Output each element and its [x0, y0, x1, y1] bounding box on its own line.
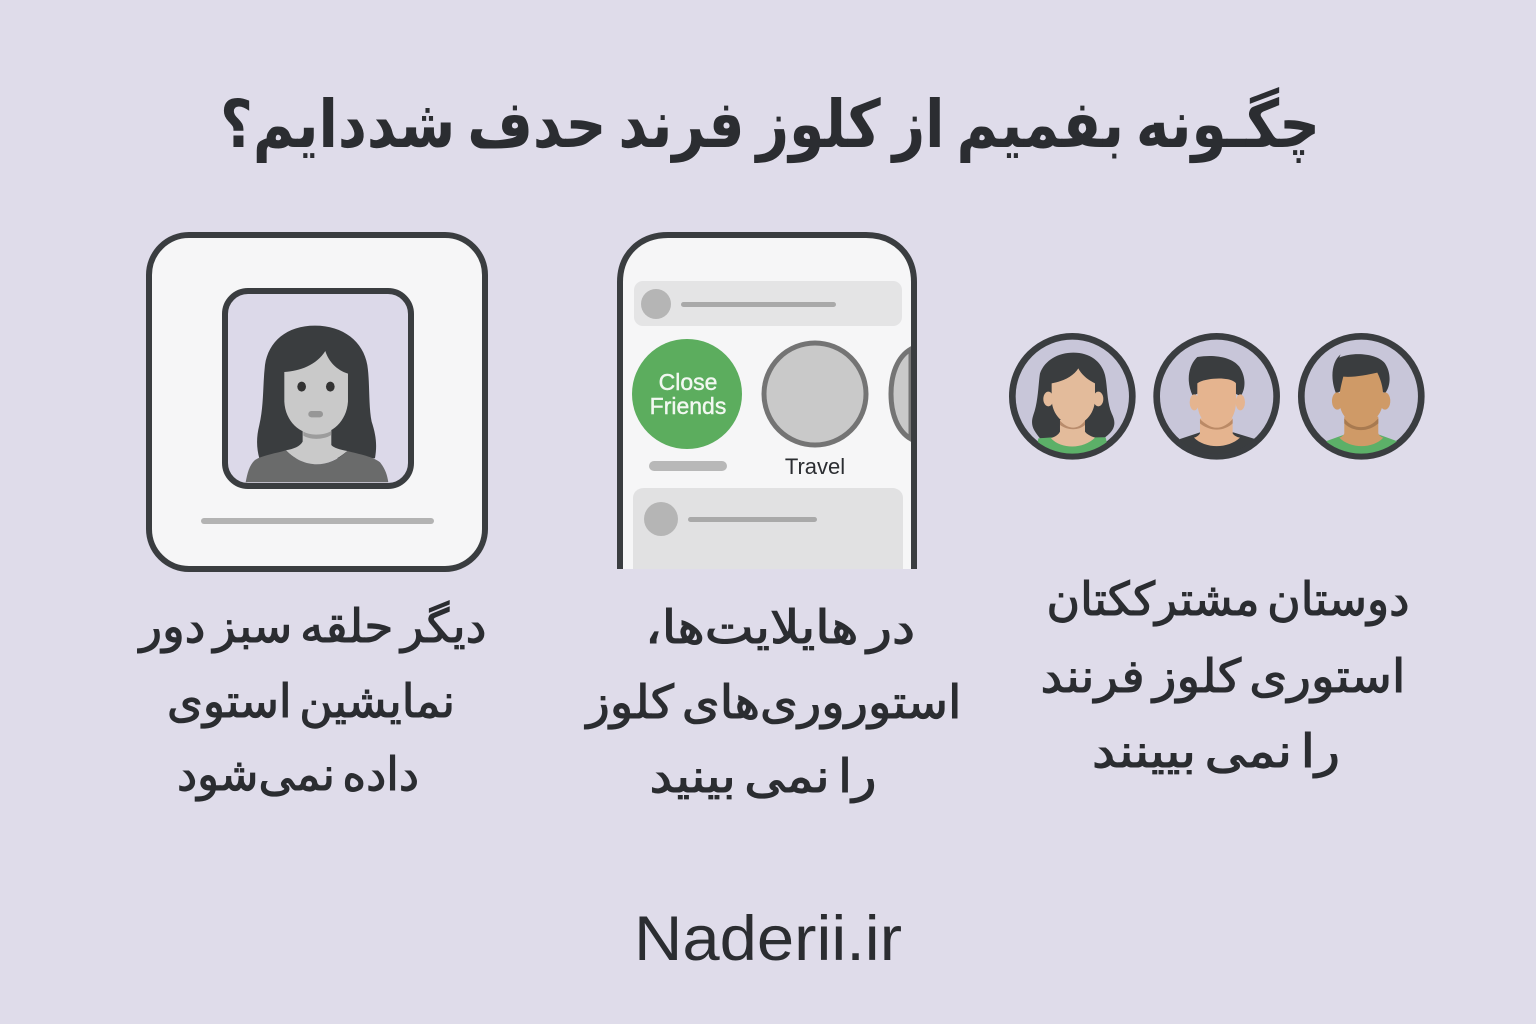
- panel: profile card icon: [149, 235, 485, 569]
- text block: right column: را نمی بیینند: [1092, 724, 1340, 778]
- text block: left column: دیگر حلقه سبز دور: [137, 599, 487, 654]
- panel: phone highlights mockup: [620, 235, 914, 569]
- text block: middle column: [584, 600, 962, 803]
- woman portrait: [246, 326, 388, 482]
- profile photo frame: [225, 291, 411, 486]
- text block: right column: [1040, 572, 1410, 778]
- text block: middle column: استوروری‌های کلوز: [584, 675, 962, 730]
- title: چگـونه بفمیم از کلوز فرند حدف شددایم؟: [220, 86, 1320, 164]
- highlight: Travel: [764, 343, 866, 479]
- text block: middle column: در هایلایت‌ها،: [645, 600, 915, 654]
- highlight: cropped: [891, 349, 911, 439]
- text block: left column: نمایشین استوی: [167, 674, 455, 729]
- highlight: Close Friends: [632, 339, 742, 471]
- avatar: man green shirt: [1301, 336, 1421, 465]
- footer brand: Naderii.ir: [634, 904, 902, 974]
- highlight: Close Friends: Friends: [650, 393, 726, 419]
- bottom list row: [633, 488, 903, 569]
- text block: right column: استوری کلوز فرنند: [1040, 649, 1406, 704]
- highlight: Close Friends: Close: [659, 369, 717, 395]
- highlight: Travel: Travel: [785, 454, 845, 479]
- text block: left column: [137, 599, 487, 802]
- text block: left column: داده نمی‌شود: [177, 747, 419, 802]
- top list row: [634, 281, 902, 326]
- placeholder line: [201, 518, 434, 524]
- text block: middle column: را نمی بینید: [650, 749, 876, 803]
- avatar: man dark shirt: [1157, 336, 1277, 465]
- text block: right column: دوستان مشترککتان: [1046, 572, 1410, 627]
- panel: three friends avatars: [1012, 336, 1421, 465]
- avatar: woman: [1012, 336, 1132, 463]
